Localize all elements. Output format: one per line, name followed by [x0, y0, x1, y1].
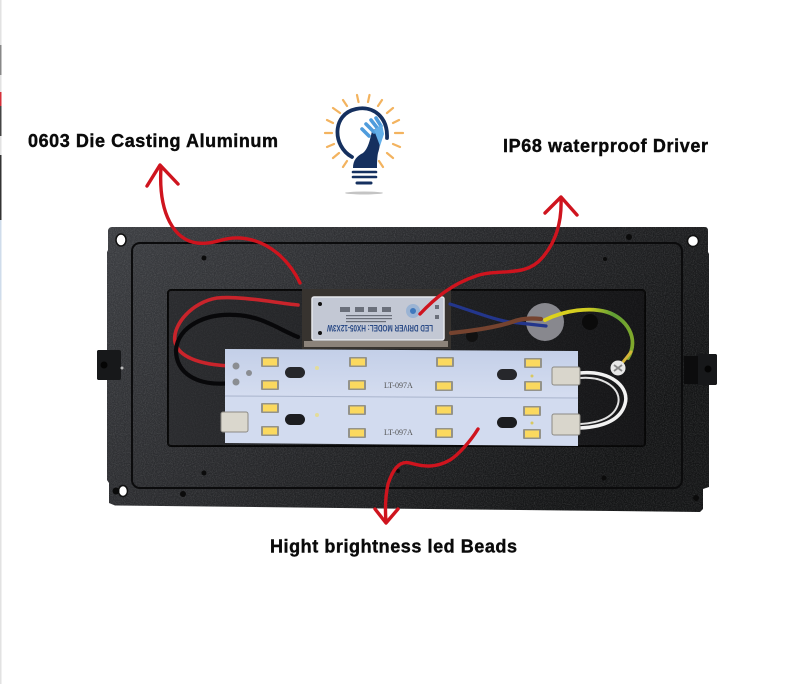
- LED driver module: [302, 289, 451, 349]
- earth screw: [610, 360, 626, 376]
- wires: blue, brown and earth: [450, 304, 632, 362]
- heading: 0603 Die Casting Aluminum: 0603 Die Casting Aluminum: [28, 131, 278, 151]
- driver label text: LED DRIVER MODEL: HX05-12X3W: [327, 322, 433, 333]
- heading: Hight brightness led Beads: Hight brightness led Beads: [270, 536, 517, 556]
- LED boards: [225, 349, 578, 446]
- heading: IP68 waterproof Driver: IP68 waterproof Driver: [503, 136, 708, 156]
- mounting tabs: [97, 350, 717, 385]
- arrow: to LED beads: [375, 429, 478, 523]
- board markings: LT-097A: [384, 381, 413, 390]
- connectors and white jumper wire: [221, 367, 626, 435]
- left edge strip: [0, 0, 2, 684]
- wires: red and black power leads: [175, 298, 298, 384]
- solder pads: [232, 362, 252, 386]
- arrow: to IP68 driver: [420, 197, 577, 314]
- grommet: [526, 303, 564, 341]
- recessed panel: [168, 290, 645, 446]
- screw holes: [112, 234, 698, 496]
- arrow: to die casting aluminum: [147, 165, 300, 283]
- LED beads: [261, 357, 542, 439]
- board slots: [285, 367, 305, 378]
- raised rim outline: [132, 243, 682, 488]
- housing: die cast aluminium base: [97, 227, 717, 512]
- LED boards: LT-097A: [384, 428, 413, 437]
- icon: light bulb with hand: [325, 95, 403, 194]
